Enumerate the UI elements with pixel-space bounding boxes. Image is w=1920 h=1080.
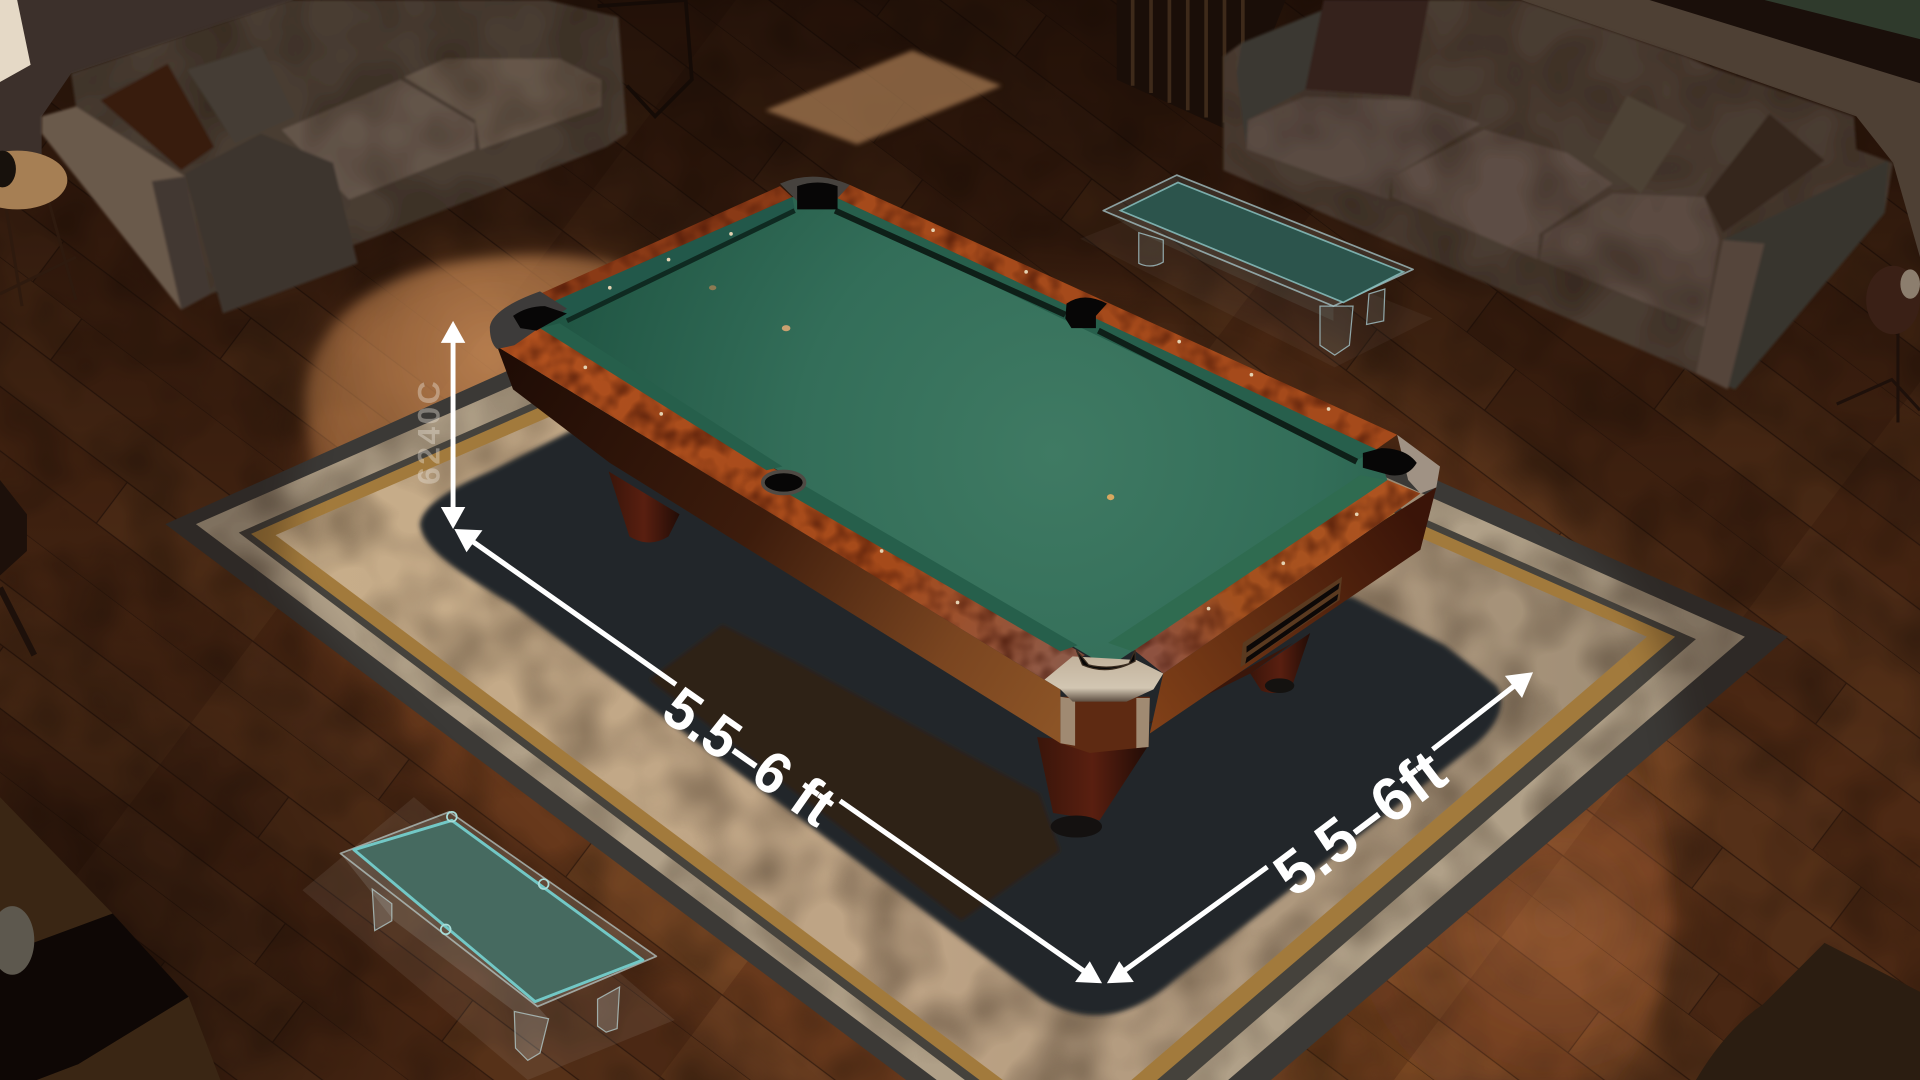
rail diamonds [583, 228, 1359, 610]
ghost legs [372, 889, 620, 1060]
ghost table: bottom left [302, 797, 675, 1080]
felt cushion: top right [835, 197, 1376, 460]
corner: left [490, 291, 567, 349]
pillow: dark right [1704, 114, 1824, 233]
leg: front [1037, 737, 1147, 838]
dimension: long side clearance [454, 529, 1102, 983]
seat cushion 2 [1392, 130, 1613, 260]
bottom left shelf [0, 797, 220, 1080]
seat cushion 3 [1539, 193, 1719, 327]
pillow: small [1593, 96, 1686, 193]
wall [0, 0, 294, 184]
floor lighting pools [304, 254, 1672, 1080]
pockets [513, 182, 1417, 670]
faint rotated watermark label: 6240C [411, 379, 447, 485]
right side apron [1150, 487, 1436, 733]
pool table [490, 177, 1440, 838]
seat cushion 1 [1247, 97, 1480, 200]
felt cushion: top left [546, 197, 795, 320]
arrow: short side [1107, 672, 1533, 983]
ghost felt [354, 820, 643, 1002]
sofa: left [42, 0, 627, 313]
right wall and window [1521, 0, 1920, 257]
pillow: dark top [1305, 0, 1429, 97]
window frame [1649, 0, 1920, 83]
ghost legs [1139, 233, 1385, 355]
pocket: top [797, 182, 838, 209]
right side table [1837, 266, 1920, 422]
side table [0, 151, 76, 306]
left arm [42, 107, 211, 310]
felt cushion shadow [835, 211, 1357, 462]
rail: top right [835, 185, 1397, 449]
sofa: right [1223, 0, 1893, 389]
rug outer dark border [165, 218, 1788, 1080]
leg: left [609, 471, 680, 542]
corner: right [1397, 435, 1440, 493]
felt cushion: front left [540, 323, 1078, 651]
table cast shadow on rug [420, 422, 1501, 1015]
balls [709, 285, 1114, 500]
throw blanket [185, 133, 358, 313]
pocket: side top [1065, 298, 1107, 328]
ghost table: top right [1080, 175, 1433, 367]
rug cream band [196, 239, 1745, 1080]
ghost felt [1120, 182, 1403, 302]
ghost rim [340, 812, 656, 1007]
rug dark stripe [239, 263, 1696, 1080]
right arm outer [1696, 160, 1888, 389]
right arm front [1696, 240, 1764, 389]
corner: top [780, 177, 850, 201]
ghost plane [1080, 208, 1433, 367]
ghost skirt [1103, 211, 1333, 321]
arrow: table height [441, 321, 465, 529]
sunlight patch on floor [765, 50, 1002, 144]
bottom right armchair [1696, 943, 1920, 1080]
cue rack [1117, 0, 1286, 129]
rail: front right [1133, 480, 1420, 673]
lower apron [1090, 643, 1293, 753]
left wall and lamp [0, 0, 294, 306]
ghost plane [302, 797, 675, 1080]
pocket: side front [763, 471, 804, 493]
ghost top [1103, 175, 1413, 306]
rail: top left [540, 186, 792, 305]
ghost pockets [441, 812, 549, 934]
label: long side: 5.5–6 ft [651, 675, 847, 839]
sofa body [42, 0, 627, 310]
ball return slot [1240, 577, 1342, 667]
ghost skirt [340, 853, 549, 1019]
dimension: short side clearance [1107, 672, 1533, 983]
left edge furniture [0, 480, 34, 655]
rug [165, 218, 1788, 1080]
small end table at top [598, 0, 692, 116]
pocket: left [513, 306, 567, 331]
seat cushion 2 [404, 59, 601, 149]
vase [0, 906, 34, 975]
pillow: grey [187, 47, 295, 143]
left side apron [497, 347, 1060, 743]
label: short side: 5.5–6ft [1261, 737, 1459, 909]
sofa body [1223, 0, 1893, 389]
pillow: red [100, 64, 214, 170]
arrow: long side [454, 529, 1102, 983]
pocket: front [1076, 650, 1135, 670]
rail: front left [497, 328, 1085, 689]
leg: right [1250, 633, 1310, 693]
window glass [1764, 0, 1920, 39]
corner: front chrome [1044, 656, 1163, 702]
felt cushion: front right [1108, 475, 1387, 651]
pocket: right [1363, 448, 1417, 475]
rug gold stripe [251, 272, 1675, 1080]
corner post [1060, 697, 1150, 753]
lamp shade [0, 0, 31, 82]
felt surface [540, 197, 1387, 667]
rug inner field [276, 288, 1647, 1080]
left arm [1237, 10, 1324, 149]
seat cushion 1 [282, 80, 475, 200]
wall [1521, 0, 1920, 257]
